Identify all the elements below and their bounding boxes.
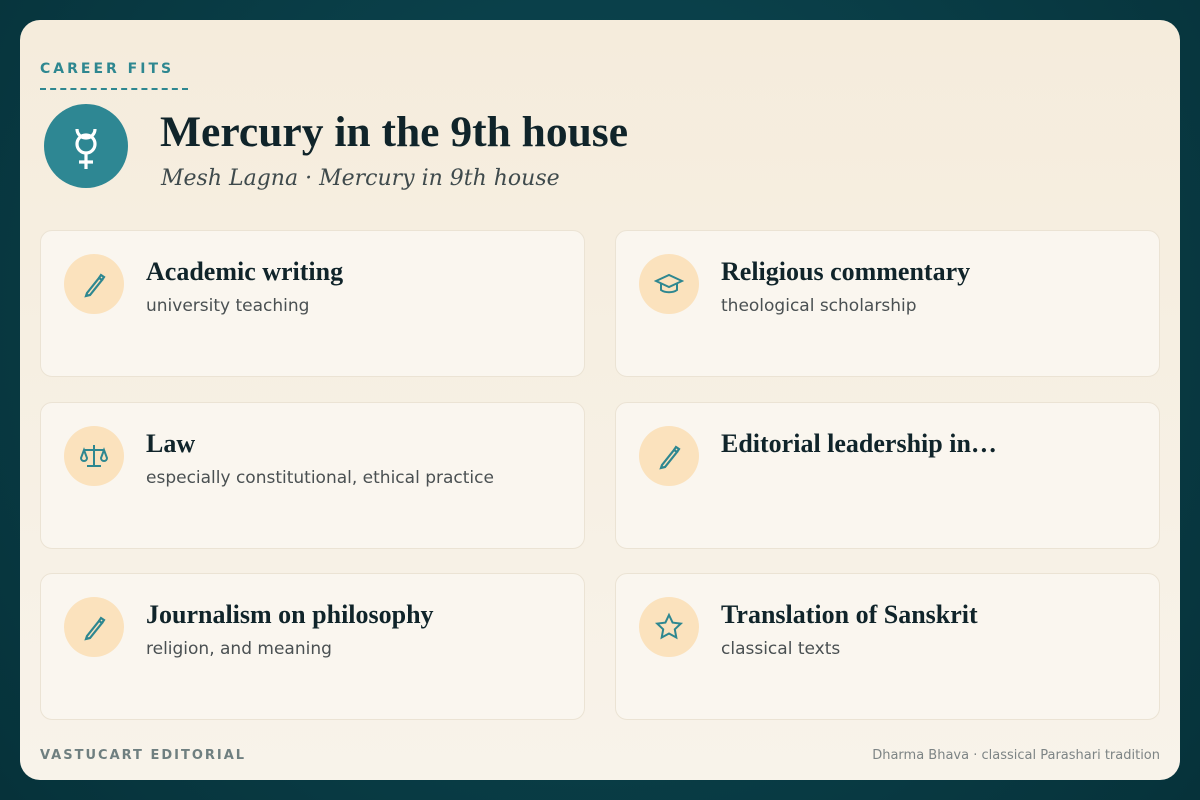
card: academic writing: university teaching xyxy=(146,296,309,316)
card: religious commentary: Religious commentary xyxy=(721,257,970,286)
icon: pen xyxy=(64,254,124,314)
card: religious commentary xyxy=(615,230,1160,377)
card: journalism: religion, and meaning xyxy=(146,639,332,659)
card: journalism xyxy=(40,573,585,720)
card: translation xyxy=(615,573,1160,720)
icon: pen xyxy=(64,597,124,657)
card: journalism: Journalism on philosophy xyxy=(146,600,434,629)
card: editorial leadership: Editorial leadership in… xyxy=(721,429,997,458)
card: academic writing: Academic writing xyxy=(146,257,343,286)
card: religious commentary: theological scholarship xyxy=(721,296,916,316)
icon: pen xyxy=(639,426,699,486)
card: law xyxy=(40,402,585,549)
card: translation: classical texts xyxy=(721,639,840,659)
kicker: career fits: CAREER FITS xyxy=(40,61,174,77)
card: editorial leadership xyxy=(615,402,1160,549)
card: academic writing xyxy=(40,230,585,377)
title: Mercury in the 9th house xyxy=(160,108,628,156)
footer right: Dharma Bhava · classical Parashari tradition xyxy=(872,748,1160,763)
icon: mercury xyxy=(44,104,128,188)
card: law: Law xyxy=(146,429,195,458)
card: translation: Translation of Sanskrit xyxy=(721,600,978,629)
card: law: especially constitutional, ethical practice xyxy=(146,468,494,488)
footer left: VASTUCART EDITORIAL xyxy=(40,748,246,763)
icon: star xyxy=(639,597,699,657)
subtitle: Mesh Lagna · Mercury in 9th house xyxy=(161,166,560,191)
icon: graduation cap xyxy=(639,254,699,314)
icon: scales xyxy=(64,426,124,486)
